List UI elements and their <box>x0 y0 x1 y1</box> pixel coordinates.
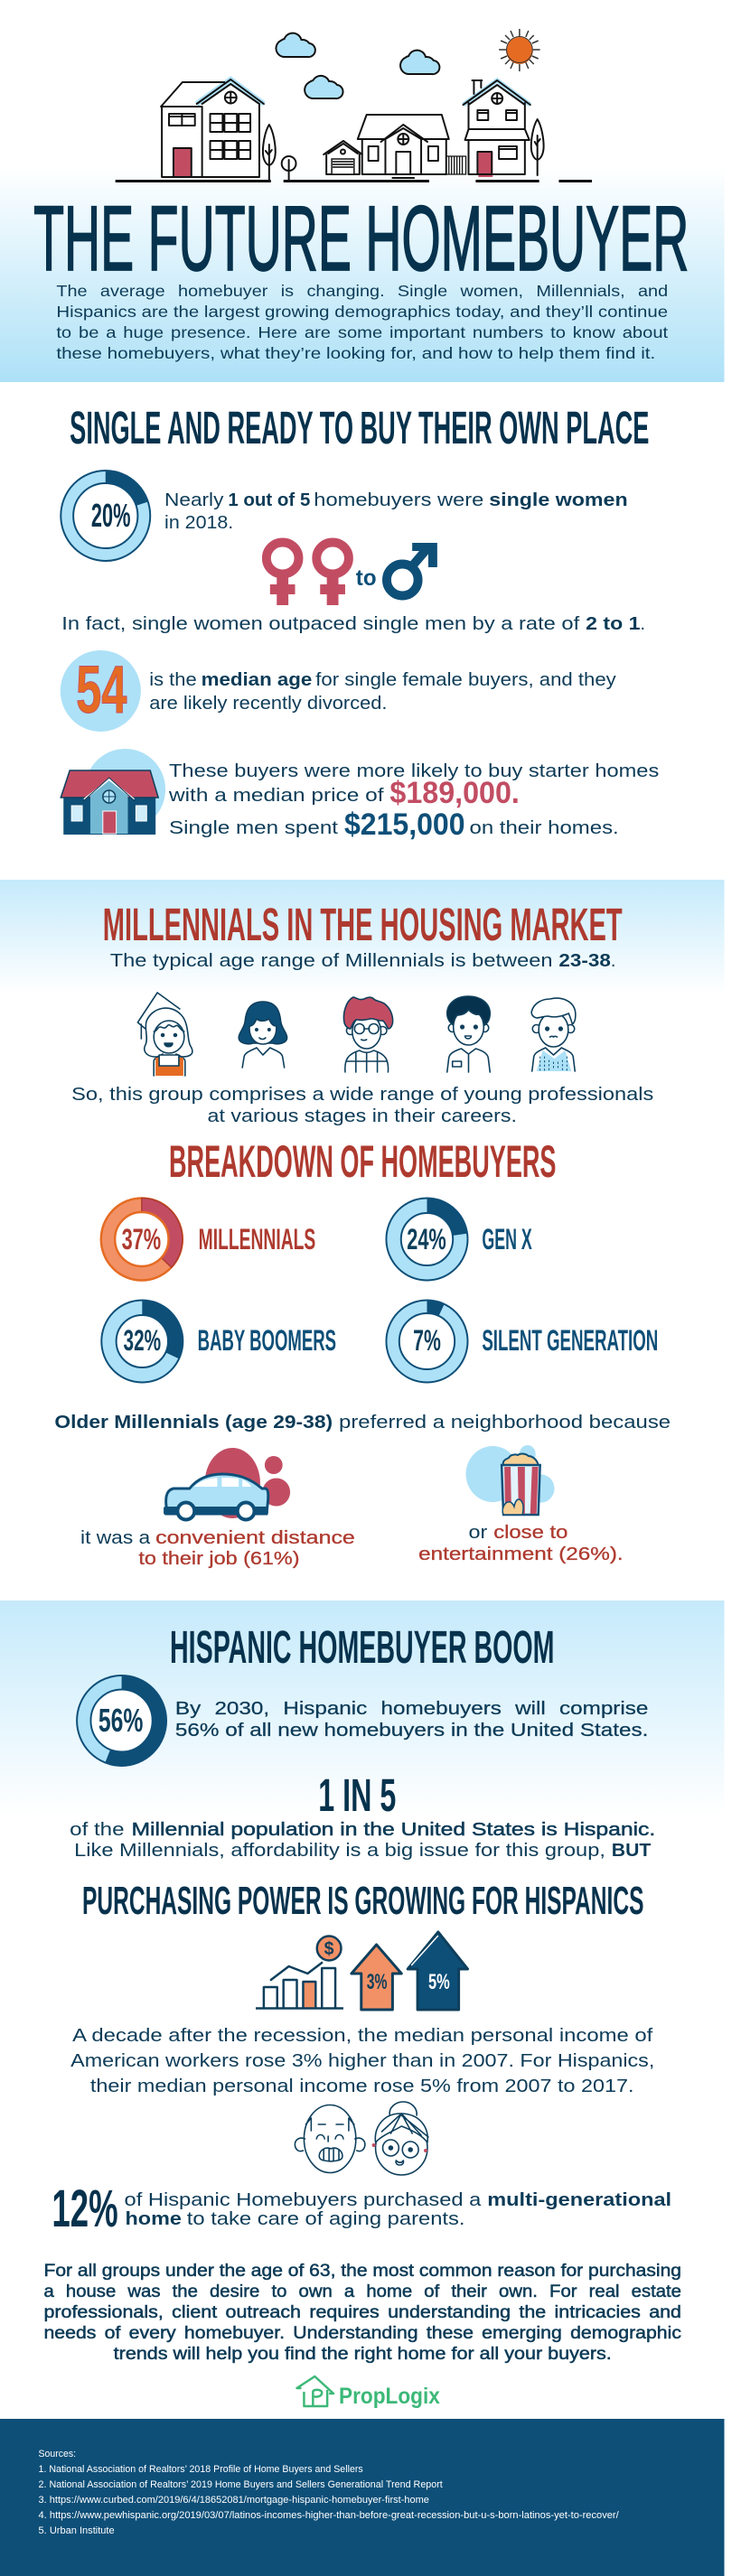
arrow: 5% <box>408 1932 468 2010</box>
text: by 2030: By 2030, Hispanic homebuyers will comprise <box>175 1699 648 1719</box>
text: close to entertainment: entertainment (26%). <box>418 1545 624 1564</box>
stat: median age 54: 54 <box>76 652 127 727</box>
intro text: The average homebuyer is changing. Single women, Millennials, and <box>56 282 668 300</box>
icon: cloud right <box>400 51 439 74</box>
icon: right tree <box>531 119 544 175</box>
illustration: neighborhood <box>116 29 592 181</box>
person: graduate <box>137 993 192 1076</box>
icon: house with price <box>61 749 165 835</box>
panel: header <box>0 29 724 382</box>
icon: two female symbols to male symbol <box>267 542 437 605</box>
text: older millennials: Older Millennials (age 29-38) <box>54 1413 333 1433</box>
icon: two female symbols to male symbol: to <box>356 565 377 591</box>
text: 1 out of 5 <box>164 490 628 533</box>
road <box>116 180 592 182</box>
stat: 12% multi-generational: of Hispanic Homebuyers purchased a <box>125 2190 482 2210</box>
donut chart: millennials 37%: MILLENNIALS <box>199 1223 315 1255</box>
intro text: these homebuyers, what they’re looking for, and how to help them find it. <box>56 344 655 362</box>
text: millennial population: Like Millennials, affordability is a big issue for this group, <box>74 1841 605 1861</box>
stat: 12% multi-generational: 12% <box>52 2180 118 2238</box>
donut chart: baby boomers 32%: BABY BOOMERS <box>198 1324 336 1357</box>
text: 2 to 1: . <box>640 614 645 634</box>
logo: PropLogix: PropLogix <box>339 2384 440 2409</box>
text: older millennials: preferred a neighborhood because <box>339 1413 671 1433</box>
stat: median age 54: median age <box>202 670 312 690</box>
icon: popcorn <box>466 1445 554 1515</box>
text: convenient distance: it was a <box>80 1528 151 1548</box>
icon: tall tree <box>263 125 276 181</box>
text: starter home prices: $189,000. <box>389 776 520 810</box>
stat: median age 54: for single female buyers, and they <box>315 670 616 690</box>
text: 2 to 1: 2 to 1 <box>586 614 640 634</box>
intro text <box>56 282 668 362</box>
arrow: 3% <box>352 1945 401 2010</box>
panel: millennials <box>0 880 724 1569</box>
person: woman with dark hair <box>239 1002 287 1068</box>
stat: median age 54: is the <box>149 670 197 690</box>
text: millennial population: BUT <box>612 1841 651 1861</box>
stat: median age 54 <box>61 650 616 732</box>
donut chart: gen x 24% <box>386 1198 532 1281</box>
text: 1 out of 5: single women <box>489 490 628 510</box>
stat: 1 in 5: 1 IN 5 <box>318 1769 396 1821</box>
donut chart: gen x 24%: 24% <box>407 1223 446 1255</box>
text: income growth: American workers rose 3% higher than in 2007. For Hispanics, <box>70 2051 654 2071</box>
donut chart: baby boomers 32%: 32% <box>124 1324 161 1357</box>
text: 1 out of 5: 1 out of 5 <box>228 490 310 510</box>
intro text: to be a huge presence. Here are some important numbers to know about <box>56 323 668 341</box>
donut chart: gen x 24%: GEN X <box>482 1223 532 1255</box>
icon: car <box>164 1448 290 1519</box>
sources list: 2. National Association of Realtors’ 2019 Home Buyers and Sellers Generational Trend Report <box>39 2479 443 2490</box>
donut chart: millennials 37% <box>101 1198 315 1281</box>
donut chart: 20%: 20% <box>91 498 130 534</box>
text: starter home prices: $215,000 <box>344 807 465 842</box>
text: starter home prices: on their homes. <box>469 818 619 838</box>
text: convenient distance: convenient distance <box>155 1528 355 1548</box>
stat: 12% multi-generational <box>52 2180 671 2238</box>
donut chart: 56%: 56% <box>98 1703 143 1739</box>
text: income growth: their median personal income rose 5% from 2007 to 2017. <box>90 2077 634 2096</box>
sources list: 3. https://www.curbed.com/2019/6/4/18652081/mortgage-hispanic-homebuyer-first-home <box>39 2495 429 2506</box>
donut chart: 20% <box>61 471 150 561</box>
text: convenient distance: to their job (61%) <box>138 1549 299 1569</box>
text: starter home prices <box>168 761 659 842</box>
text: millennial population: Millennial population in the United States is Hispanic. <box>131 1820 655 1840</box>
grandfather <box>295 2105 365 2173</box>
sources list <box>39 2449 620 2536</box>
house: middle <box>358 115 449 178</box>
text: 1 out of 5: homebuyers were <box>314 490 483 510</box>
text: conclusion: professionals, client outreach requires understanding the intricacies and <box>43 2303 681 2322</box>
text: conclusion: a house was the desire to own a home of their own. For real estate <box>43 2282 681 2301</box>
text: age range: 23-38 <box>558 951 611 971</box>
intro text: Hispanics are the largest growing demographics today, and they’ll continue <box>56 303 668 321</box>
icon: growth chart: $ <box>324 1939 334 1959</box>
text: close to entertainment <box>418 1523 624 1564</box>
text: convenient distance <box>80 1528 355 1569</box>
house: left <box>161 79 264 178</box>
text: young professionals <box>71 1085 653 1126</box>
text: conclusion: needs of every homebuyer. Understanding these emerging demographic <box>43 2324 681 2343</box>
icon: small tree <box>282 156 296 181</box>
stat: median age 54: are likely recently divorced. <box>149 694 387 714</box>
text: conclusion <box>43 2262 681 2364</box>
arrow: 5%: 5% <box>428 1970 450 1994</box>
text: conclusion: trends will help you find the right home for all your buyers. <box>114 2345 612 2364</box>
stat: 12% multi-generational: home <box>126 2209 182 2229</box>
panel: sources footer <box>0 2419 724 2576</box>
donut chart: silent generation 7% <box>386 1301 658 1382</box>
text: close to entertainment: or <box>468 1523 488 1543</box>
grandmother <box>372 2102 428 2175</box>
text: 2 to 1: In fact, single women outpaced single men by a rate of <box>61 614 580 634</box>
sources list: 1. National Association of Realtors’ 2018 Profile of Home Buyers and Sellers <box>39 2464 363 2475</box>
arrow: 3%: 3% <box>367 1970 387 1994</box>
person: man with glasses <box>343 997 393 1072</box>
text: young professionals: at various stages in their careers. <box>208 1106 517 1126</box>
text: age range: The typical age range of Millennials is between <box>110 951 553 971</box>
donut chart: silent generation 7%: 7% <box>413 1324 441 1357</box>
donut chart: 56% <box>77 1675 166 1766</box>
text: young professionals: So, this group comprises a wide range of young professionals <box>71 1085 653 1105</box>
icon: sun <box>499 29 540 71</box>
text: starter home prices: with a median price of <box>168 786 384 806</box>
text: millennial population: of the <box>70 1820 125 1840</box>
text: income growth <box>70 2026 654 2096</box>
logo: PropLogix <box>297 2376 440 2409</box>
stat: 12% multi-generational: to take care of aging parents. <box>187 2209 465 2229</box>
text: 1 out of 5: Nearly <box>164 490 223 510</box>
icon: growth chart <box>256 1937 343 2009</box>
panel: hispanic homebuyers <box>0 1601 724 2238</box>
icon: grandparents <box>295 2102 428 2175</box>
illustration: five millennials <box>137 993 576 1076</box>
text: by 2030: 56% of all new homebuyers in the United States. <box>175 1721 648 1741</box>
icon: fence <box>446 156 466 174</box>
text: by 2030 <box>175 1699 648 1741</box>
text: 1 out of 5: in 2018. <box>164 513 233 533</box>
person: man with vest <box>531 998 576 1071</box>
text: close to entertainment: close to <box>493 1523 567 1543</box>
text: conclusion: For all groups under the age of 63, the most common reason for purchasing <box>43 2262 681 2281</box>
stat: 12% multi-generational: multi-generational <box>487 2190 671 2210</box>
sources list: 5. Urban Institute <box>39 2525 115 2536</box>
text: age range: . <box>611 951 615 971</box>
text: older millennials <box>54 1413 671 1433</box>
text: millennial population <box>70 1820 655 1861</box>
sources list: Sources: <box>39 2449 76 2459</box>
icon: cloud left <box>276 33 315 57</box>
icon: garage <box>324 141 362 174</box>
panel: single women <box>61 402 659 842</box>
donut chart: millennials 37%: 37% <box>122 1223 161 1255</box>
text: starter home prices: These buyers were more likely to buy starter homes <box>169 761 659 781</box>
icon: cloud middle <box>305 76 343 98</box>
sources list: 4. https://www.pewhispanic.org/2019/03/07/latinos-incomes-higher-than-before-great-recession-but-u-s-born-latinos-yet-to-recover/ <box>39 2510 620 2521</box>
house: right <box>464 80 530 177</box>
text: starter home prices: Single men spent <box>169 818 339 838</box>
donut chart: baby boomers 32% <box>101 1301 336 1382</box>
person: man with black hair <box>447 996 490 1072</box>
text: income growth: A decade after the recession, the median personal income of <box>72 2026 653 2046</box>
